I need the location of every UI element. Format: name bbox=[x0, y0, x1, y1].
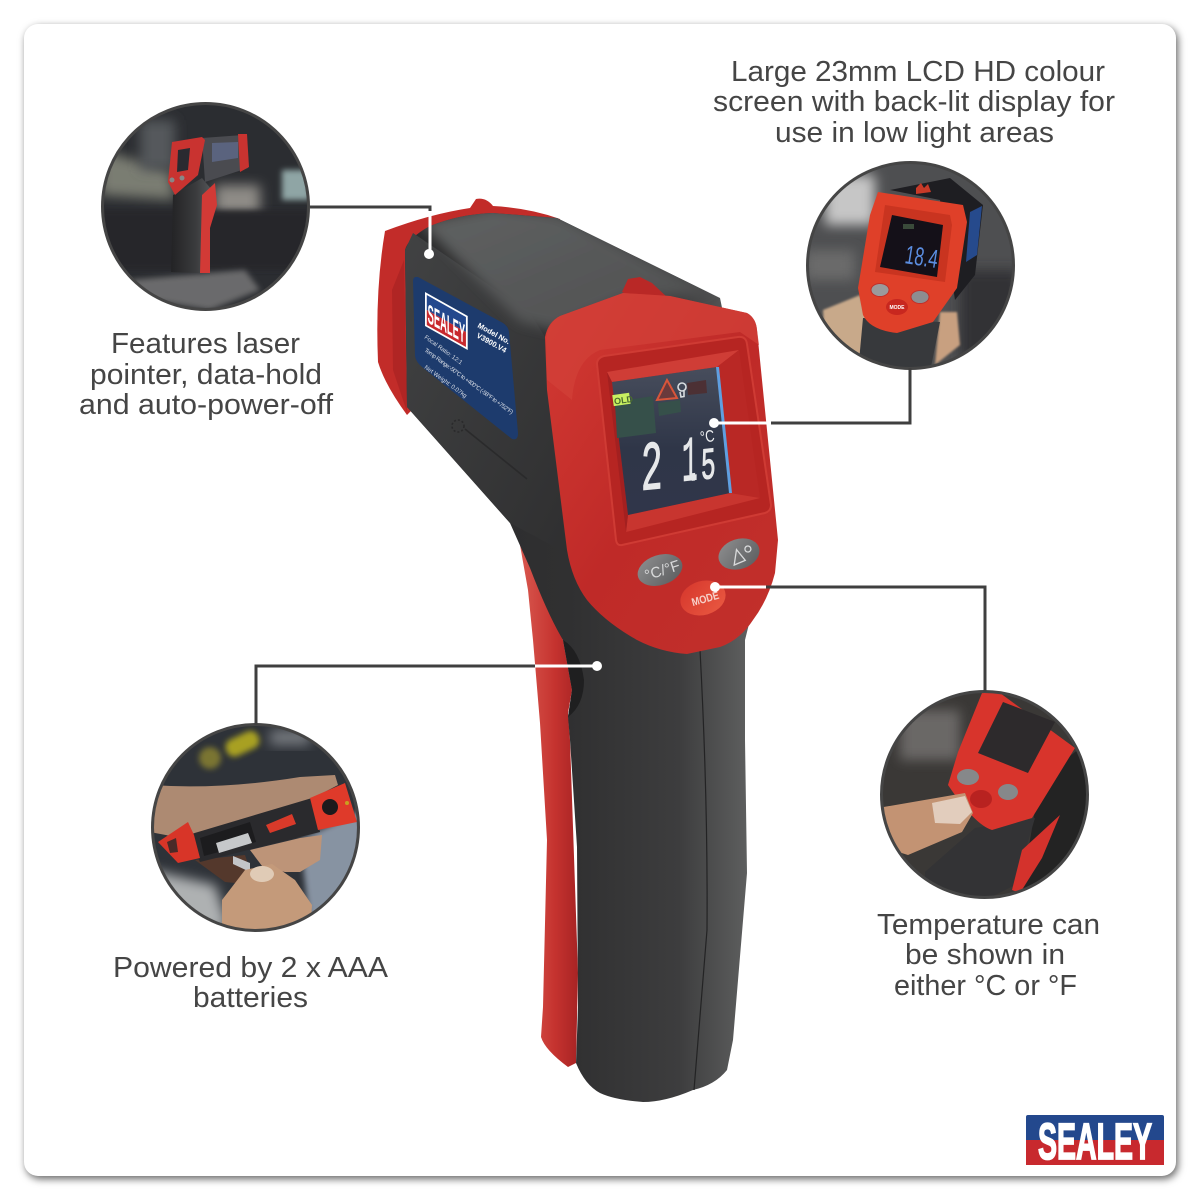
text: LCD screen caption: screen with back-lit display for bbox=[713, 86, 1115, 118]
blue specification label bbox=[413, 277, 518, 439]
C/F button bbox=[633, 549, 687, 591]
unit symbol: °C bbox=[699, 428, 716, 447]
photo: thermometer on engine bay bbox=[100, 100, 312, 312]
text: batteries caption: batteries bbox=[193, 982, 308, 1014]
inactive red segment bbox=[687, 380, 707, 395]
label text: Focal Ratio: 12:1 bbox=[423, 335, 464, 367]
text: LCD screen caption: Large 23mm LCD HD colour bbox=[731, 56, 1105, 88]
bezel left facet bbox=[607, 372, 628, 532]
bezel right facet bbox=[717, 350, 760, 498]
bezel bottom facet bbox=[626, 493, 760, 532]
text: LCD screen caption bbox=[713, 56, 1115, 149]
label text: Net Weight: 0.07kg bbox=[423, 365, 468, 400]
text: features caption bbox=[79, 328, 334, 421]
photo ring: top left bbox=[102, 104, 308, 310]
finger groove bbox=[563, 640, 584, 717]
MODE button: MODE bbox=[690, 590, 721, 609]
leader line: batteries bbox=[256, 661, 602, 725]
thermometer product image bbox=[377, 199, 778, 1102]
label text: Temp Range:-50°C to +400°C (-58°F to +752°F) bbox=[423, 348, 514, 416]
top sight ridge bbox=[622, 277, 668, 302]
photo: backlit LCD screen bbox=[805, 160, 1020, 372]
green inactive segments bbox=[615, 396, 656, 438]
photo ring: bottom right bbox=[882, 692, 1088, 898]
photo ring: bottom left bbox=[152, 724, 358, 930]
blue specification label: SEALEY bbox=[428, 298, 465, 349]
temperature reading: .5 bbox=[686, 441, 716, 495]
photo: backlit LCD screen: 18.4 bbox=[903, 239, 940, 274]
red rear cap bbox=[377, 199, 560, 415]
label text: Model No. bbox=[476, 321, 512, 346]
text: LCD screen caption: use in low light areas bbox=[775, 117, 1054, 149]
photo: finger pressing mode button bbox=[878, 688, 1090, 900]
handle seam bbox=[694, 650, 707, 1090]
leader line: mode button bbox=[710, 582, 985, 692]
bezel top facet bbox=[607, 350, 739, 382]
label logo bbox=[425, 292, 468, 351]
barrel side face bbox=[405, 233, 570, 555]
laser warning triangle bbox=[657, 380, 677, 400]
text: batteries caption bbox=[113, 952, 389, 1014]
text: temperature caption bbox=[877, 909, 1100, 1002]
screen blue edge bbox=[716, 367, 732, 493]
text: temperature caption: Temperature can bbox=[877, 909, 1100, 941]
text: temperature caption: either °C or °F bbox=[894, 970, 1077, 1002]
red front head bbox=[545, 293, 778, 654]
leader line: LCD screen bbox=[709, 368, 910, 428]
text: features caption: and auto-power-off bbox=[79, 389, 334, 421]
barrel top face bbox=[420, 207, 712, 330]
photo ring: top right bbox=[808, 162, 1014, 368]
C/F button: °C/°F bbox=[643, 557, 682, 584]
photo: backlit LCD screen: MODE bbox=[890, 305, 905, 311]
hold indicator: OLD bbox=[613, 394, 634, 406]
temperature reading: 1 bbox=[682, 426, 698, 501]
leader line: laser pointer bbox=[310, 207, 434, 259]
photo: battery compartment bbox=[150, 722, 362, 935]
red trigger strip bbox=[520, 545, 578, 1067]
LCD screen bbox=[612, 367, 732, 515]
temperature reading: 2 bbox=[641, 430, 663, 511]
text: features caption: Features laser bbox=[111, 328, 300, 360]
vent grille on barrel bbox=[452, 420, 527, 479]
screen bezel bbox=[597, 337, 771, 545]
dark gun body and handle bbox=[405, 213, 770, 1102]
MODE button bbox=[676, 575, 730, 621]
rear cap shadow line bbox=[392, 260, 407, 412]
label text: V3900.V4 bbox=[475, 331, 509, 355]
text: batteries caption: Powered by 2 x AAA bbox=[113, 952, 389, 984]
text: temperature caption: be shown in bbox=[905, 939, 1065, 971]
temperature reading bbox=[641, 426, 716, 511]
bulb icon bbox=[678, 383, 686, 397]
laser and light button bbox=[714, 533, 764, 575]
small green segment bbox=[658, 400, 681, 416]
head outer highlight bbox=[546, 293, 759, 400]
text: features caption: pointer, data-hold bbox=[90, 359, 322, 391]
